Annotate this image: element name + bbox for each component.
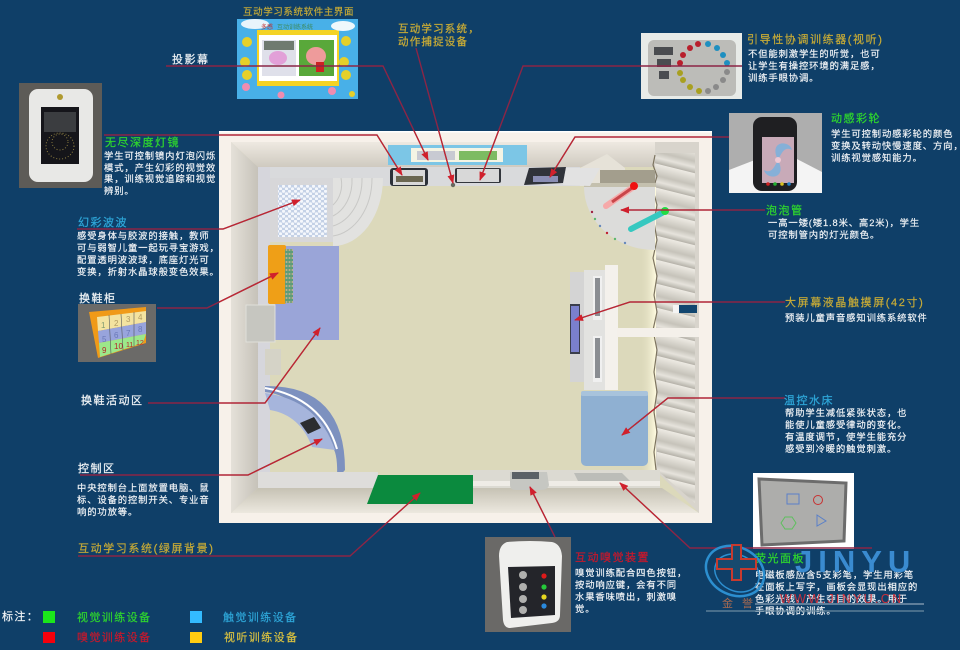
- text block: wave bubble: 变换，折射水晶球般变色效果。: [77, 266, 220, 277]
- legend: audiovisual: 视听训练设备: [224, 630, 298, 644]
- thumbnail: shoe cabinet: 12: [136, 340, 144, 347]
- text block: light panel: 色彩光线，产生夺目的效果。用于: [755, 593, 908, 604]
- light panel on wall: [574, 473, 630, 481]
- thumbnail: shoe cabinet: 8: [138, 325, 143, 334]
- text block: guided coordination trainer: 训练手眼协调。: [748, 72, 819, 83]
- text block: guided coordination trainer: 不但能刺激学生的听觉，也可: [748, 48, 881, 59]
- text block: water bed: [784, 393, 907, 454]
- leader: smell device: [530, 487, 555, 537]
- projection screen: [388, 145, 527, 165]
- leader: projection screen: [166, 66, 428, 160]
- motion capture sensor: [451, 183, 455, 187]
- logo watermark: JINYU: [795, 544, 916, 579]
- text block: bubble tube: 泡泡管: [766, 203, 804, 217]
- text block: light panel: [755, 551, 918, 616]
- bubble tube platform: [584, 182, 669, 250]
- text block: infinity mirror: 辨别。: [104, 185, 135, 196]
- left wall strip: [258, 167, 270, 488]
- text block: infinity mirror: 学生可控制镜内灯泡闪烁: [104, 150, 216, 161]
- legend: smell: [43, 630, 151, 644]
- thumbnail: shoe cabinet: 3: [126, 315, 131, 324]
- thumbnail: shoe cabinet: 9: [102, 346, 107, 355]
- thumbnail: shoe cabinet: 10: [114, 342, 123, 351]
- logo watermark: WWW.JINYU.CN: [780, 592, 903, 606]
- thumbnail: shoe cabinet: [78, 304, 156, 362]
- logo watermark: 金誉: [722, 596, 762, 610]
- text block: water bed: 帮助学生减低紧张状态，也: [785, 407, 907, 418]
- leader: shoe changing area: [148, 328, 320, 403]
- text block: guided coordination trainer: 引导性协调训练器(视听): [747, 32, 884, 46]
- wall: top: [231, 142, 699, 167]
- thumbnail: smell device: [485, 537, 571, 632]
- text block: smell device: 觉。: [575, 604, 595, 614]
- text block: light panel: 电磁板感应含5支彩笔，学生用彩笔: [755, 569, 914, 580]
- text block: bubble tube: 一高一矮(矮1.8米、高2米)，学生: [768, 217, 920, 228]
- wall: left: [231, 142, 258, 513]
- leader: guided coordination trainer: [480, 66, 742, 180]
- stepped corner platform: [333, 178, 383, 246]
- leader: bubble tube: [621, 209, 765, 211]
- text block: guided coordination trainer: [747, 32, 884, 83]
- text block: wave bubble: 幻彩波波: [78, 216, 128, 229]
- text block: dynamic colour wheel: 学生可控制动感彩轮的颜色: [831, 128, 953, 139]
- leader: light panel: [620, 483, 872, 548]
- leader: touchscreen: [575, 302, 785, 320]
- green screen mat: [367, 475, 473, 504]
- text block: dynamic colour wheel: 训练视觉感知能力。: [831, 152, 923, 163]
- text block: smell device: [575, 550, 687, 614]
- thumbnail: guided coordination trainer: [641, 33, 742, 99]
- thumbnail: shoe cabinet: 1: [101, 321, 106, 330]
- leader: infinity mirror: [104, 135, 402, 175]
- bottom wall unit: [258, 470, 660, 488]
- text block: control area: 中央控制台上面放置电脑、鼠: [77, 482, 210, 493]
- thumbnail: shoe cabinet: 6: [114, 331, 119, 340]
- dynamic colour wheel on wall: [524, 167, 600, 186]
- logo watermark: [698, 537, 924, 611]
- text block: water bed: 有温度调节，使学生能充分: [785, 431, 907, 442]
- curtains: right wall: [640, 153, 697, 503]
- label: interactive learning system: 互动学习系统，: [398, 22, 480, 35]
- LCD touchscreen unit: [570, 265, 618, 390]
- mirror device on wall: [390, 168, 428, 186]
- legend: 标注：: [2, 609, 39, 623]
- text block: infinity mirror: 果，训练视觉追踪和视觉: [104, 173, 216, 184]
- legend: smell: 嗅觉训练设备: [77, 630, 151, 644]
- heading: software interface: 互动学习系统软件主界面: [243, 6, 354, 18]
- thumbnail: software interface: 互动训练系统: [277, 23, 313, 31]
- thumbnail: shoe cabinet: 7: [126, 329, 131, 338]
- legend: audiovisual: [190, 630, 298, 644]
- text block: control area: 响的功放等。: [77, 506, 138, 517]
- text block: touchscreen: [785, 295, 928, 323]
- legend: [2, 609, 298, 644]
- text block: water bed: 能使儿童感受律动的变化。: [785, 419, 907, 430]
- floor: [258, 167, 658, 488]
- text block: guided coordination trainer: 让学生有操控环境的满足感，: [748, 60, 881, 71]
- thumbnail: infinity mirror: [19, 83, 102, 188]
- panel: room floor plan: [219, 131, 712, 523]
- leader: control area: [80, 439, 322, 475]
- thumbnail: shoe cabinet: 4: [138, 313, 143, 322]
- smell device on wall: [510, 472, 549, 490]
- text block: touchscreen: 预装儿童声音感知训练系统软件: [785, 312, 928, 323]
- leader: shoe cabinet: [157, 273, 278, 308]
- text block: infinity mirror: 模式，产生幻彩的视觉效: [104, 162, 216, 173]
- text block: light panel: 在面板上写字，画板会显现出相应的: [755, 581, 918, 592]
- text block: water bed: 温控水床: [784, 393, 834, 407]
- leader: green screen: [78, 493, 420, 556]
- leader: dynamic colour wheel: [550, 137, 729, 177]
- text block: smell device: 互动嗅觉装置: [575, 550, 650, 564]
- text block: smell device: 按动响应键，会有不同: [575, 579, 677, 590]
- guided coordination device on wall: [455, 168, 501, 183]
- grey box and door: [246, 305, 281, 375]
- text block: dynamic colour wheel: 动感彩轮: [831, 111, 881, 125]
- thumbnail: software interface: 多感: [261, 23, 273, 31]
- text block: wave bubble: [77, 216, 220, 277]
- text block: smell device: 水果香味喷出，刺激嗅: [575, 591, 677, 602]
- text block: infinity mirror: [104, 135, 216, 196]
- leader: wave bubble: [77, 200, 300, 229]
- wall: bottom: [231, 488, 699, 513]
- text block: light panel: 荧光面板: [755, 551, 805, 565]
- label: shoe cabinet: 换鞋柜: [79, 291, 116, 305]
- thumbnail: light panel: [753, 473, 854, 549]
- leader: water bed: [622, 398, 785, 435]
- text block: touchscreen: 大屏幕液晶触摸屏(42寸): [785, 295, 924, 309]
- text block: control area: [77, 461, 210, 517]
- text block: wave bubble: 感受身体与胶波的接触，教师: [77, 230, 210, 241]
- text block: dynamic colour wheel: 变换及转动快慢速度、方向，: [831, 140, 960, 151]
- legend: visual: [43, 610, 151, 624]
- leader: motion capture: [416, 48, 453, 183]
- thumbnail: software interface: [237, 19, 358, 99]
- legend: touch: [190, 610, 297, 624]
- text block: bubble tube: [766, 203, 920, 240]
- shoe cabinet: [268, 245, 293, 304]
- top wall unit: [258, 154, 656, 187]
- text block: bubble tube: 可控制管内的灯光颜色。: [768, 229, 880, 240]
- text block: infinity mirror: 无尽深度灯镜: [105, 135, 180, 149]
- label: projection screen: 投影幕: [172, 52, 210, 66]
- text block: wave bubble: 配置透明波波球，底座灯光可: [77, 254, 210, 265]
- text block: water bed: 感受到冷暖的触觉刺激。: [785, 443, 897, 454]
- legend: touch: 触觉训练设备: [223, 610, 297, 624]
- text block: control area: 标、设备的控制开关、专业音: [77, 494, 210, 505]
- water bed: [581, 391, 648, 466]
- label: shoe changing area: 换鞋活动区: [81, 393, 144, 407]
- text block: light panel: 手眼协调的训练。: [755, 605, 837, 616]
- shoe changing mat: [275, 246, 339, 340]
- text block: dynamic colour wheel: [831, 111, 960, 163]
- thumbnail: shoe cabinet: 5: [102, 335, 107, 344]
- thumbnail: shoe cabinet: 11: [126, 342, 133, 349]
- thumbnail: dynamic colour wheel: [729, 113, 822, 193]
- partition wall: [617, 328, 699, 337]
- wall: right: [655, 142, 699, 513]
- thumbnail: shoe cabinet: 2: [114, 319, 119, 328]
- text block: wave bubble: 可与弱智儿童一起玩寻宝游戏，: [77, 242, 220, 253]
- text block: smell device: 嗅觉训练配合四色按钮，: [575, 567, 687, 578]
- label: interactive learning system: 动作捕捉设备: [398, 35, 468, 48]
- wave bubble panel: [270, 178, 333, 242]
- legend: visual: 视觉训练设备: [77, 610, 151, 624]
- text block: control area: 控制区: [78, 461, 116, 475]
- control console: [265, 386, 345, 479]
- label: green screen: 互动学习系统(绿屏背景): [78, 541, 215, 555]
- label: interactive learning system: [398, 22, 480, 48]
